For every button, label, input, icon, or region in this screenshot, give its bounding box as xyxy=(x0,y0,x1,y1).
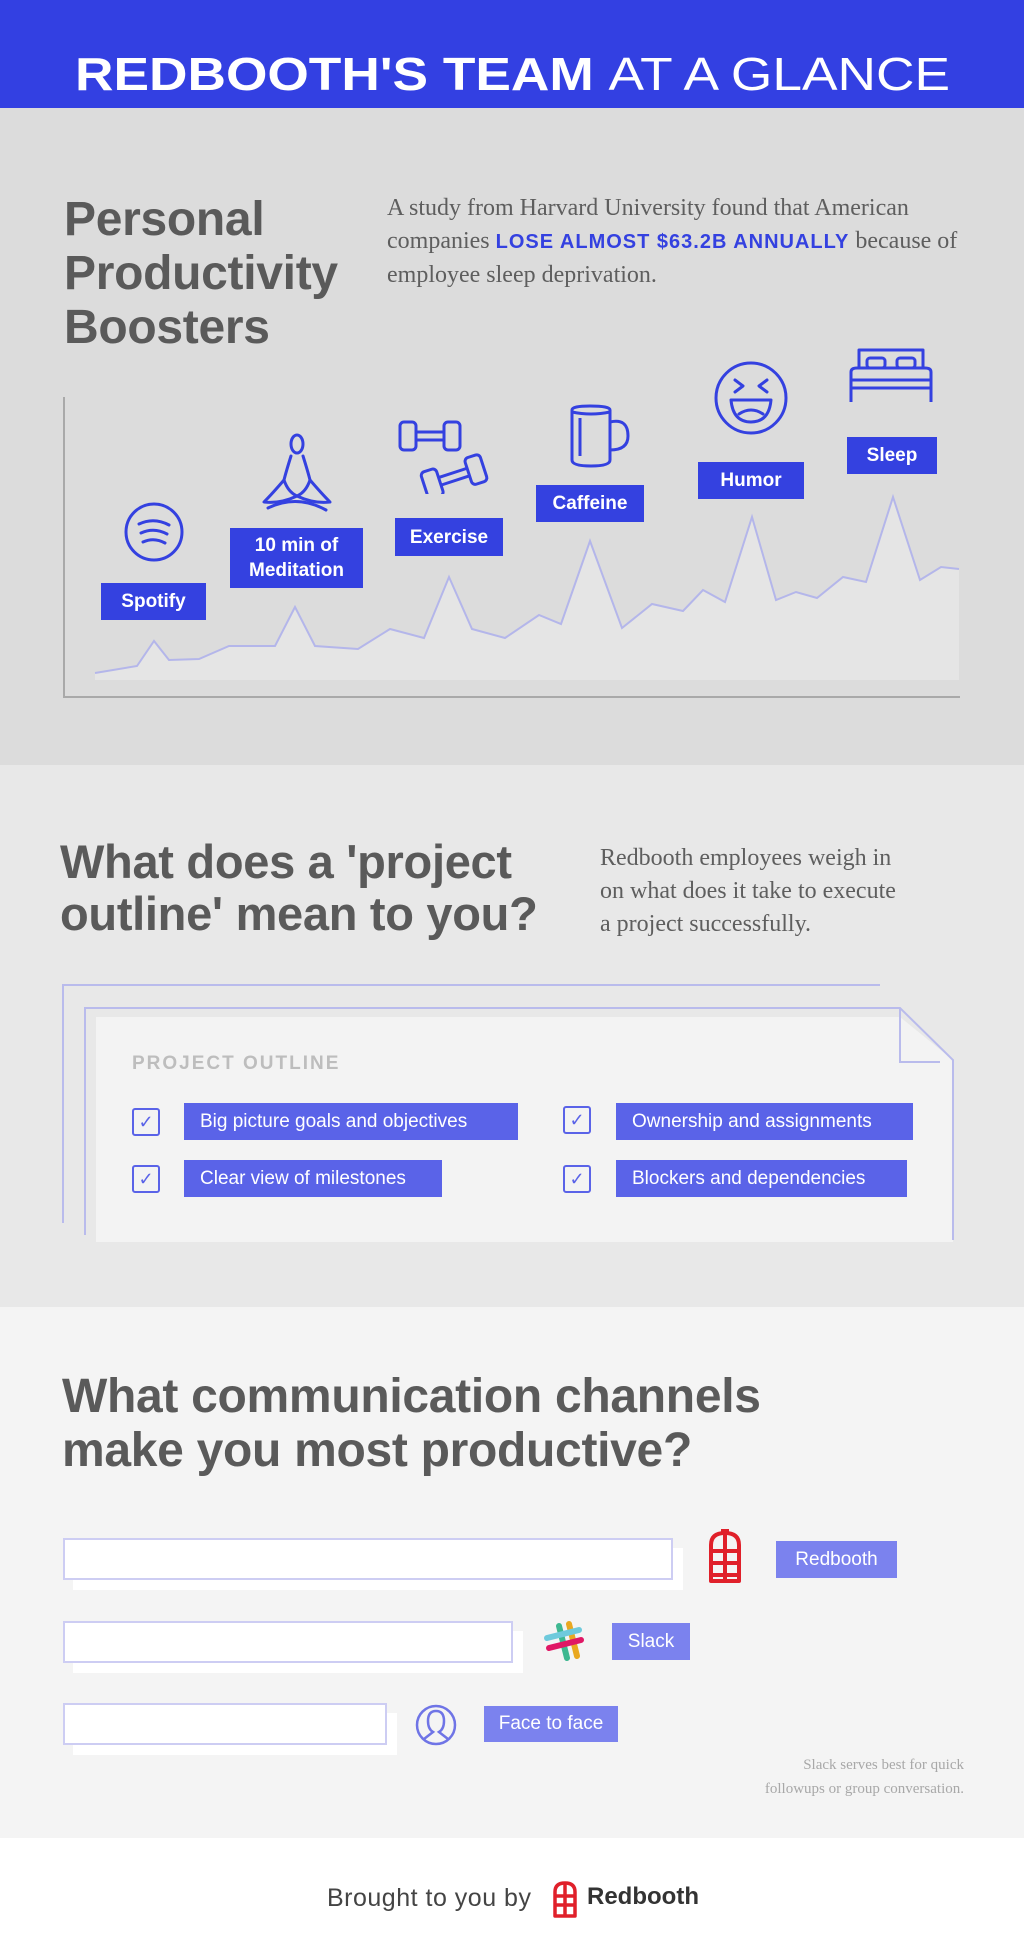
panel: communication channels xyxy=(0,1307,1024,1838)
label: meditation: 10 min of xyxy=(255,535,338,556)
label: sleep xyxy=(847,437,937,474)
label: spotify: Spotify xyxy=(121,591,186,612)
icon: coffee mug xyxy=(570,404,630,468)
icon: redbooth booth xyxy=(709,1529,741,1583)
icon: smiley xyxy=(714,362,788,434)
checklist item: ownership: ✓ xyxy=(569,1110,585,1130)
brand name: Redbooth xyxy=(587,1883,699,1910)
heading: Productivity xyxy=(64,247,338,300)
text block: intro: a project successfully. xyxy=(600,911,811,937)
title: REDBOOTH'S TEAM AT A GLANCE xyxy=(75,48,950,100)
text block: harvard study: A study from Harvard University found that American xyxy=(387,195,909,221)
note: Slack serves best for quick xyxy=(803,1757,964,1773)
credit text: Brought to you by xyxy=(327,1884,531,1912)
checklist item: ownership: Ownership and assignments xyxy=(632,1110,872,1132)
label: face to face: Face to face xyxy=(499,1713,603,1734)
checklist item: blockers: Blockers and dependencies xyxy=(632,1168,865,1188)
text block: intro: Redbooth employees weigh in xyxy=(600,845,891,871)
checklist item: milestones: ✓ xyxy=(138,1168,154,1188)
checklist item: big picture xyxy=(132,1103,518,1140)
icon: slack xyxy=(544,1621,584,1661)
heading: outline' mean to you? xyxy=(60,887,538,940)
checklist item: blockers xyxy=(563,1160,907,1197)
note xyxy=(765,1757,964,1797)
checklist item: milestones: Clear view of milestones xyxy=(200,1168,406,1188)
text block: harvard study: employee sleep deprivation. xyxy=(387,262,657,288)
heading: Boosters xyxy=(64,301,270,354)
header banner xyxy=(0,0,1024,108)
icon: spotify xyxy=(124,502,184,562)
text block: intro: on what does it take to execute xyxy=(600,878,896,904)
note: followups or group conversation. xyxy=(765,1781,964,1797)
icon: bed xyxy=(850,348,932,402)
heading: make you most productive? xyxy=(62,1424,692,1477)
label: humor xyxy=(698,462,804,499)
heading: What does a 'project xyxy=(60,835,512,888)
label: meditation xyxy=(230,528,363,588)
icon: dumbbells xyxy=(398,420,488,494)
bar: redbooth xyxy=(63,1538,673,1580)
heading xyxy=(60,835,538,940)
heading: What communication channels xyxy=(62,1370,761,1423)
text block: intro xyxy=(600,845,896,937)
label: caffeine xyxy=(536,485,644,522)
text block: harvard study xyxy=(387,195,958,288)
icon: person xyxy=(416,1704,456,1746)
checklist item: big picture: ✓ xyxy=(138,1112,154,1132)
checklist item: blockers: ✓ xyxy=(569,1168,585,1188)
footer xyxy=(0,1838,1024,1959)
label: sleep: Sleep xyxy=(867,445,917,466)
checklist item: big picture: Big picture goals and objectives xyxy=(200,1110,467,1132)
heading: project outline: PROJECT OUTLINE xyxy=(132,1053,340,1074)
label: exercise: Exercise xyxy=(410,526,488,548)
label: meditation: Meditation xyxy=(249,560,344,581)
icon: meditation xyxy=(262,434,332,512)
checklist item: ownership xyxy=(563,1103,913,1140)
label: slack xyxy=(612,1623,690,1660)
chart: productivity line xyxy=(63,397,960,698)
text block: harvard study: companies LOSE ALMOST $63.2B ANNUALLY because of xyxy=(387,228,957,254)
heading: Personal xyxy=(64,193,264,246)
label: redbooth xyxy=(776,1541,897,1578)
card: project outline sheet xyxy=(62,984,954,1242)
checklist item: milestones xyxy=(132,1160,442,1197)
label: caffeine: Caffeine xyxy=(553,493,627,514)
label: exercise xyxy=(395,518,503,556)
heading xyxy=(64,193,338,354)
label: slack: Slack xyxy=(628,1630,674,1652)
label: humor: Humor xyxy=(720,470,782,491)
icon: redbooth logo xyxy=(553,1881,577,1918)
bar: face to face xyxy=(63,1703,387,1745)
panel: project outline xyxy=(0,765,1024,1307)
label: spotify xyxy=(101,583,206,620)
heading xyxy=(62,1370,761,1477)
label: face to face xyxy=(484,1706,618,1742)
panel: personal productivity boosters xyxy=(0,108,1024,765)
label: redbooth: Redbooth xyxy=(795,1548,878,1570)
bar: slack xyxy=(63,1621,513,1663)
